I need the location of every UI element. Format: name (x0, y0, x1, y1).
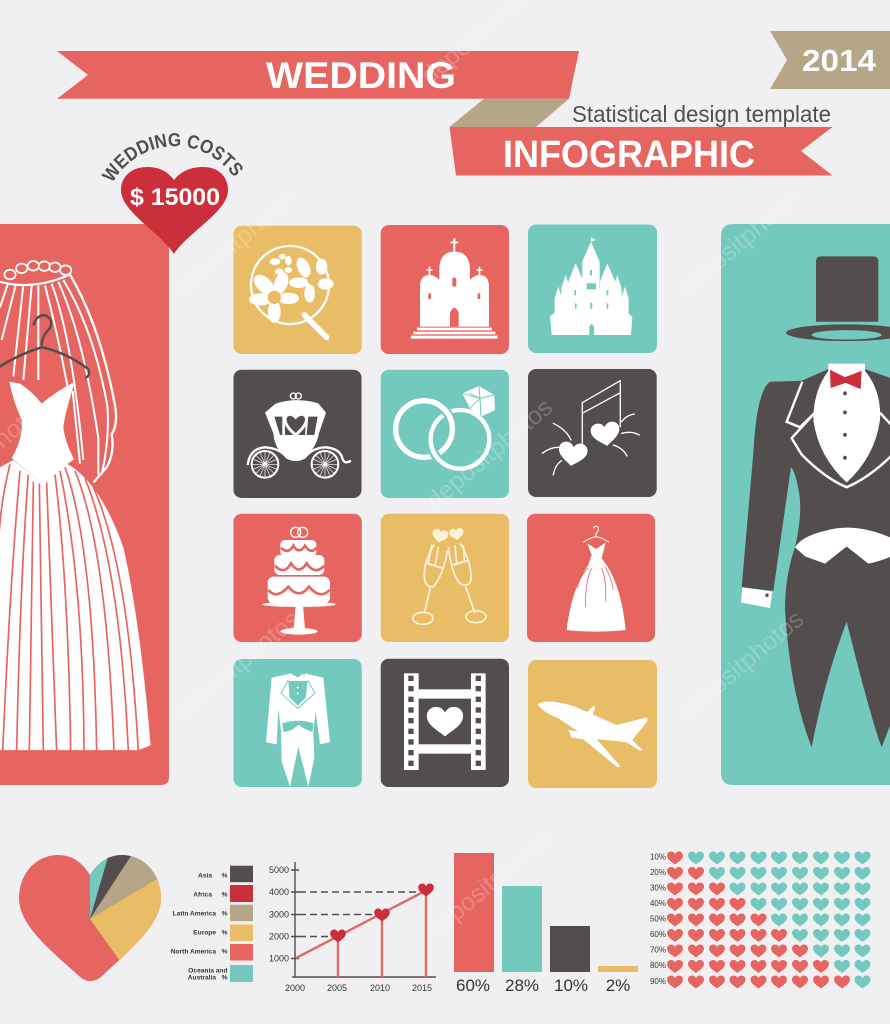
chart: heart grid: 50% (650, 914, 666, 924)
chart: heart grid: 30% (650, 884, 666, 892)
legend: % (222, 948, 228, 956)
watermarks: depositphotos (421, 823, 558, 945)
chart: line: 2015 (412, 983, 432, 993)
legend (171, 866, 253, 982)
legend: % (222, 974, 228, 982)
tile: film strip (381, 659, 509, 787)
tile: carriage (234, 370, 362, 498)
legend: Europe (193, 930, 216, 936)
chart: heart grid (650, 852, 870, 988)
tile: champagne glasses (381, 514, 509, 642)
tile: church (381, 225, 509, 354)
chart: line (269, 862, 436, 993)
chart: line: 1000 (269, 954, 289, 964)
tile: airplane (528, 660, 657, 788)
chart: bars: 60% (456, 976, 490, 995)
tile: rings (381, 370, 509, 498)
panel: bride dress (0, 224, 169, 785)
waistcoat (795, 528, 890, 564)
legend: Oceania and (188, 968, 228, 974)
tile: music note (528, 369, 657, 497)
chart: heart grid: 40% (650, 899, 666, 908)
chart: line: 2000 (285, 983, 305, 993)
tile: bouquet (234, 226, 362, 354)
tile: cake (234, 514, 362, 642)
chart: line: 5000 (269, 865, 289, 875)
chart: heart grid: 10% (650, 852, 666, 862)
chart: heart grid: 20% (650, 868, 666, 877)
chart: heart grid: 90% (650, 977, 666, 986)
tailcoat (742, 369, 890, 747)
watermarks: depositphotos (672, 605, 809, 727)
watermarks: depositphotos (168, 605, 305, 727)
legend: North America (171, 948, 216, 956)
legend: Latin America (173, 910, 216, 918)
chart: bars: 28% (505, 976, 539, 995)
watermarks: depositphotos (168, 181, 305, 303)
title ribbon: infographic (450, 127, 832, 176)
tile: small tuxedo (234, 659, 362, 787)
top hat (786, 256, 890, 341)
legend: % (222, 930, 228, 936)
chart: bars: 2% (606, 976, 630, 995)
title ribbon: wedding (57, 51, 579, 127)
legend: % (222, 892, 228, 898)
chart: bars (454, 853, 638, 995)
hanger (0, 315, 89, 377)
tile: small dress (527, 514, 655, 642)
year ribbon (770, 31, 890, 89)
gown (0, 460, 151, 750)
year ribbon: 2014 (802, 43, 877, 78)
shirt and bow tie (813, 364, 880, 483)
chart: line: 2000 (269, 932, 289, 942)
wedding costs badge: WEDDING COSTS (101, 133, 243, 181)
title ribbon: wedding: WEDDING (266, 55, 456, 96)
legend: % (222, 910, 228, 918)
chart: heart pie (19, 855, 161, 982)
watermarks: depositphotos (672, 181, 809, 303)
chart: line: 2010 (370, 983, 390, 993)
wedding costs badge (101, 133, 243, 254)
chart: bars: 10% (554, 976, 588, 995)
veil (0, 275, 116, 483)
panel: groom suit (721, 224, 890, 785)
legend: Australia (188, 974, 216, 982)
cuff (741, 587, 772, 608)
chart: heart grid: 70% (650, 946, 666, 954)
wedding costs badge: $ 15000 (130, 184, 220, 211)
chart: line: 3000 (269, 910, 289, 920)
legend: Africa (193, 892, 212, 898)
legend: % (222, 872, 228, 880)
title ribbon: infographic: INFOGRAPHIC (503, 134, 755, 176)
subtitle: Statistical design template (572, 101, 831, 127)
chart: line: 2005 (327, 983, 347, 993)
chart: line: 4000 (269, 887, 289, 897)
chart: heart grid: 80% (650, 961, 666, 970)
legend: Asia (198, 872, 212, 880)
watermarks: depositphotos (421, 393, 558, 515)
tile: castle (528, 224, 657, 353)
chart: heart grid: 60% (650, 930, 666, 939)
